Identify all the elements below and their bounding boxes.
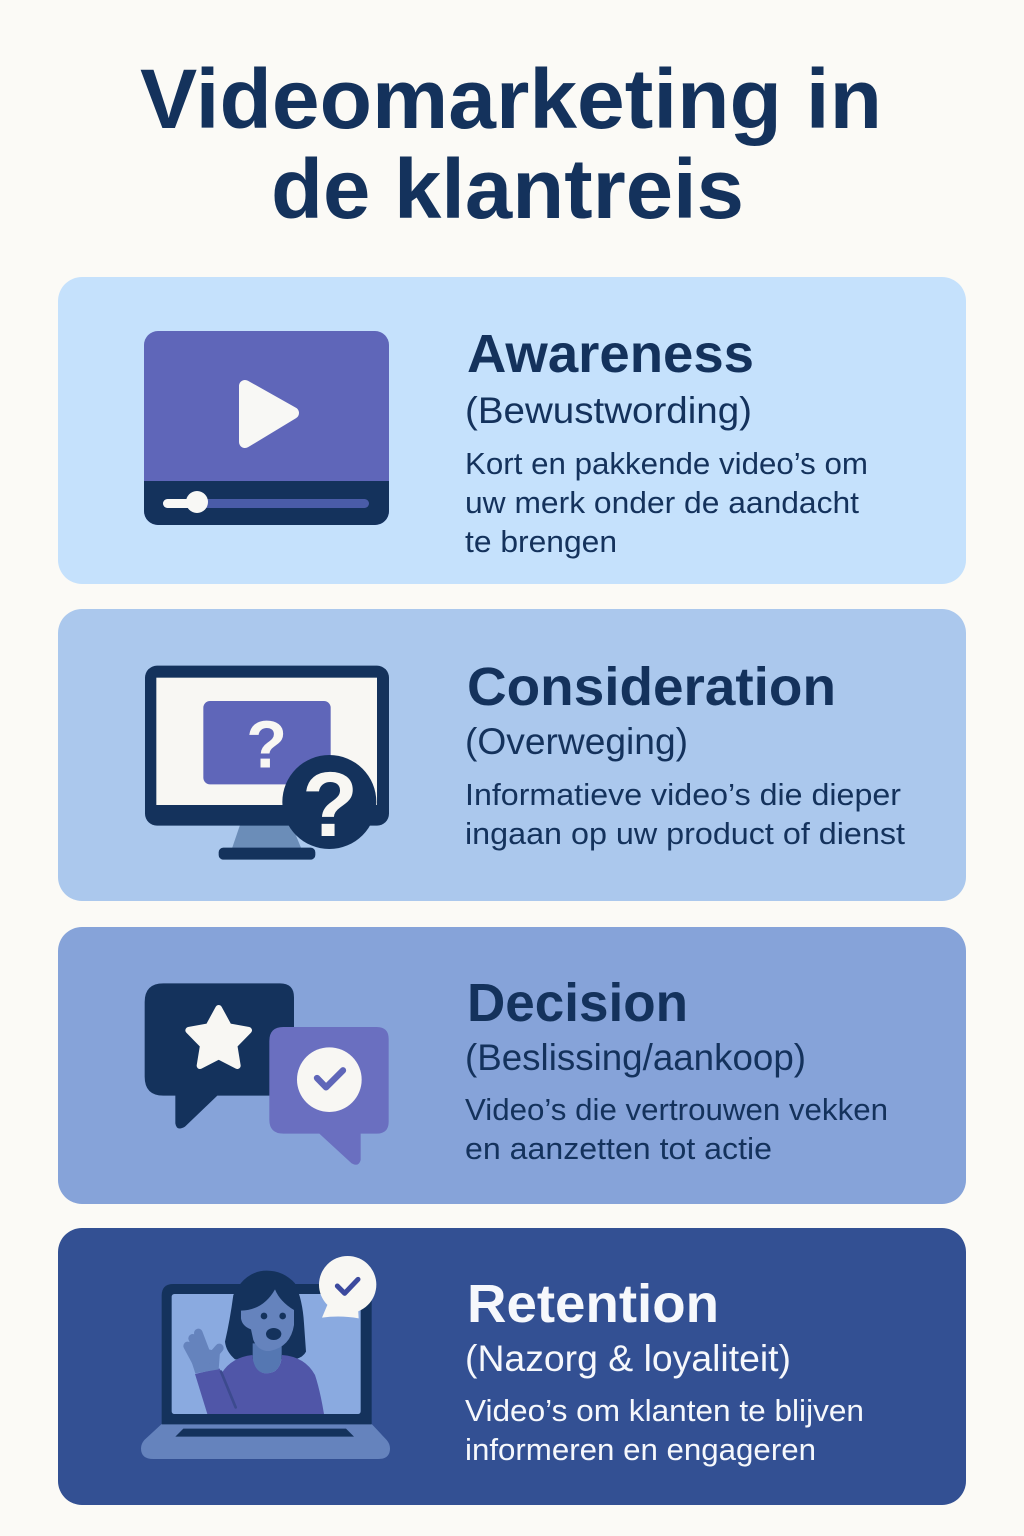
icon: laptop with waving woman bbox=[141, 1256, 390, 1459]
text: retention description: Video’s om klanten te blijven bbox=[465, 1393, 864, 1428]
title: de klantreis bbox=[271, 142, 744, 236]
panel: decision bbox=[58, 927, 966, 1204]
panel: retention bbox=[58, 1228, 966, 1505]
panel: consideration bbox=[58, 609, 966, 901]
heading: consideration: Consideration bbox=[467, 657, 836, 717]
text: decision description bbox=[465, 1092, 888, 1166]
text: awareness description bbox=[465, 446, 868, 559]
title: Videomarketing in bbox=[140, 52, 882, 146]
text: decision description: Video’s die vertrouwen vekken bbox=[465, 1092, 888, 1127]
heading: awareness: Awareness bbox=[467, 324, 754, 384]
heading: decision: Decision bbox=[467, 973, 688, 1033]
text: awareness description: uw merk onder de aandacht bbox=[465, 485, 859, 520]
subheading: nazorg en loyaliteit: (Nazorg & loyaliteit) bbox=[465, 1338, 791, 1379]
icon: monitor with question marks bbox=[145, 666, 389, 860]
text: awareness description: Kort en pakkende video’s om bbox=[465, 446, 868, 481]
title bbox=[140, 52, 882, 236]
panel: awareness bbox=[58, 277, 966, 584]
text: consideration description bbox=[465, 777, 905, 851]
hand bbox=[188, 1333, 220, 1373]
icon: video player bbox=[144, 331, 389, 525]
subheading: overweging: (Overweging) bbox=[465, 721, 688, 762]
subheading: bewustwording: (Bewustwording) bbox=[465, 390, 752, 431]
text: consideration description: ingaan op uw product of dienst bbox=[465, 816, 905, 851]
icon: monitor with question marks: ? bbox=[246, 708, 287, 782]
icon: speech bubbles with star and check bbox=[145, 983, 389, 1165]
text: consideration description: Informatieve video’s die dieper bbox=[465, 777, 901, 812]
subheading: beslissing/aankoop: (Beslissing/aankoop) bbox=[465, 1037, 806, 1078]
text: awareness description: te brengen bbox=[465, 524, 617, 559]
icon: monitor with question marks: ? bbox=[302, 754, 358, 856]
text: retention description: informeren en engageren bbox=[465, 1432, 816, 1467]
heading: retention: Retention bbox=[467, 1274, 719, 1334]
text: decision description: en aanzetten tot actie bbox=[465, 1131, 772, 1166]
text: retention description bbox=[465, 1393, 864, 1467]
